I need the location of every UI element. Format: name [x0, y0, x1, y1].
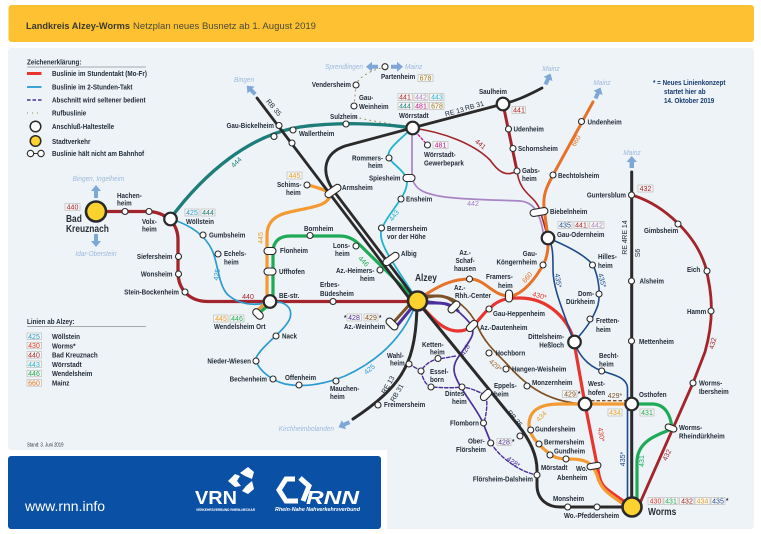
stations east: Eich	[687, 267, 700, 274]
line labels: 444	[230, 156, 244, 170]
arrow: Mainz Saulheim	[541, 66, 560, 87]
stations central: Eppels-	[494, 383, 517, 390]
stations west: Lons-	[333, 243, 351, 250]
legend: Linien ab Alzey: 443	[28, 362, 40, 369]
stations central: Monzernheim	[532, 380, 573, 387]
arrow: Mainz Partenheim: Mainz	[405, 64, 423, 71]
stations west: Uffhofen	[279, 269, 305, 276]
hub stations	[164, 98, 638, 410]
stations east: Ibersheim	[699, 389, 729, 396]
stations central: Az.-	[454, 285, 466, 292]
legend: Linien ab Alzey: 440	[28, 352, 40, 359]
line number badges: 435	[712, 498, 724, 506]
line number badges: 429	[365, 315, 377, 322]
arrow: Sprendlingen	[325, 62, 378, 72]
legend: Linien ab Alzey: Linien ab Alzey:	[27, 319, 75, 326]
header bar: Netzplan neues Busnetz ab 1. August 2019	[133, 21, 316, 31]
legend: symbols: Buslinie hält nicht am Bahnhof	[52, 151, 145, 158]
logo: RNN	[275, 478, 361, 513]
line number badges: 443	[431, 94, 443, 102]
stations north: Gau-Odernheim	[557, 232, 604, 239]
line number badges	[65, 74, 729, 506]
line number badges: 432	[681, 498, 693, 506]
logo: VRN: VERKEHRSVERBUND RHEIN-NECKAR	[196, 508, 256, 512]
note: neues Linienkonzept: 14. Oktober 2019	[664, 98, 714, 105]
stations east: Guntersblum	[587, 192, 626, 200]
stations central: Wo.-Pfeddersheim	[564, 513, 619, 520]
note: neues Linienkonzept: * = Neues Linienkonzept	[653, 80, 726, 87]
line number badges: *	[344, 315, 347, 322]
stations east	[496, 192, 729, 441]
line labels: 429*	[487, 359, 503, 373]
stations west: Nieder-Wiesen	[207, 358, 251, 366]
line number badges: *	[726, 498, 729, 505]
stations east: Becht-	[599, 353, 619, 360]
stations central: Abenheim	[557, 475, 587, 482]
line labels: 440	[242, 294, 254, 301]
stations central: Gau-Heppenheim	[493, 311, 545, 318]
line: 446 green	[258, 236, 417, 314]
stations north: Sulzheim	[330, 114, 358, 121]
arrow: Idar-Oberstein	[75, 234, 117, 258]
stations central: Hangen-Weisheim	[512, 366, 566, 374]
line labels: 660	[521, 271, 534, 285]
logo: VRN: VRN	[195, 488, 237, 508]
stations west: Nack	[282, 333, 297, 341]
line labels: 431	[639, 455, 646, 467]
legend: Linien ab Alzey: Wendelsheim	[52, 371, 92, 378]
line number badges: 431	[641, 410, 653, 417]
line labels: 442	[467, 201, 479, 208]
line number badges: 445	[289, 173, 300, 180]
stations central: Az.-	[459, 250, 471, 257]
arrow: Sprendlingen: Sprendlingen	[325, 64, 363, 71]
stations north: Spiesheim	[369, 175, 400, 183]
line number badges: 442	[591, 222, 603, 230]
line number badges: *	[578, 391, 581, 398]
line: 429 brown	[417, 296, 585, 404]
city stop: Alzey	[408, 272, 438, 310]
stations west: Büdesheim	[320, 291, 354, 298]
stations east: Dom-	[578, 291, 595, 298]
legend: Linien ab Alzey: 425	[28, 334, 40, 341]
line labels: 430*	[596, 427, 605, 443]
stations north	[227, 64, 622, 258]
line: railway RB 35 south	[417, 301, 632, 507]
line number badges: 678	[420, 76, 431, 82]
city stop: Worms: Worms	[648, 506, 676, 518]
line labels: 660	[571, 134, 583, 148]
line labels: 428*	[460, 341, 473, 357]
line labels: 446	[356, 255, 370, 269]
line number badges: 434	[609, 410, 621, 417]
arrow: Kirchheimbolanden: Kirchheimbolanden	[279, 426, 334, 433]
line labels: 428*	[505, 456, 521, 470]
line labels: S6	[635, 249, 642, 257]
stations east: Gau-	[523, 251, 538, 258]
stations central: heim	[390, 360, 405, 368]
line labels: 434	[535, 410, 549, 424]
stations north: Schornsheim	[518, 146, 558, 153]
line: 481 pink dashed	[412, 128, 428, 145]
city stop: Bad Kreuznach: Kreuznach	[66, 223, 109, 235]
line number badges: 444	[399, 104, 411, 110]
line number badges: *	[379, 315, 382, 322]
stations north: heim	[368, 163, 383, 170]
line: 432 dark red	[632, 195, 711, 503]
line number badges: 425	[186, 210, 198, 217]
arrow: Idar-Oberstein: Idar-Oberstein	[75, 251, 117, 258]
arrow: Mainz Undenheim: Mainz	[593, 80, 611, 87]
line labels: 430*	[532, 291, 548, 302]
stations west: Armsheim	[342, 185, 373, 192]
line: 435 dark blue	[548, 238, 628, 505]
stations central: heim	[452, 399, 467, 406]
stations central: Bermersheim	[544, 439, 584, 447]
line labels: 432	[709, 337, 718, 350]
legend: symbols: Buslinie im 2-Stunden-Takt	[52, 84, 133, 92]
stations west: Siefersheim	[137, 254, 173, 261]
line labels: 441	[473, 138, 487, 151]
stations north: Gau-	[359, 95, 374, 102]
legend: Linien ab Alzey: Bad Kreuznach	[52, 352, 98, 360]
arrow: Bingen, Ingelheim: Bingen, Ingelheim	[73, 176, 124, 183]
line: railway RE 13 RB 31 north	[326, 88, 542, 302]
stations north: Ensheim	[406, 196, 432, 204]
logo: RNN: Rhein-Nahe Nahverkehrsverbund	[275, 507, 361, 513]
line: 428 purple thick near Alzey	[396, 303, 458, 327]
legend: symbols: Stadtverkehr	[52, 139, 91, 146]
arrow: Mainz Partenheim	[391, 62, 423, 72]
stations east: Worms-	[699, 380, 723, 388]
stations north: vor der Höhe	[387, 234, 426, 241]
stations north: Saulheim	[479, 89, 507, 96]
legend: symbols: Abschnitt wird seltener bedient	[52, 97, 146, 105]
stations central: Wahl-	[387, 353, 405, 360]
stations central: Hochborn	[495, 350, 525, 358]
stations central: Gundheim	[554, 448, 585, 456]
stations central: Rhh.-Center	[455, 293, 491, 300]
stations central: heim	[494, 391, 509, 399]
stations west: Schims-	[277, 182, 302, 189]
arrow: Kirchheimbolanden	[279, 418, 352, 433]
stations west: Stein-Bockenheim	[124, 289, 179, 297]
stations central: hausen	[454, 266, 476, 273]
line labels: RE 13	[444, 107, 465, 118]
stations west: Az.-Heimers-	[336, 268, 375, 275]
stations north: Rommers-	[352, 155, 384, 163]
stations east: Rheindürkheim	[679, 433, 725, 441]
line number badges: 432	[640, 186, 651, 193]
arrow: Bingen	[234, 77, 259, 98]
line: 443 cyan	[381, 128, 417, 300]
stations east: Mettenheim	[639, 339, 674, 346]
note: neues Linienkonzept	[653, 80, 726, 105]
legend: Linien ab Alzey: 430	[28, 343, 40, 350]
line number badges: 678	[431, 104, 443, 110]
logo: VRN	[195, 467, 256, 512]
city stop: Bad Kreuznach	[66, 202, 109, 235]
line number badges: 428	[348, 315, 360, 322]
stations central: Ketten-	[422, 342, 444, 349]
legend: symbols	[27, 59, 147, 158]
stations west: Offenheim	[285, 375, 316, 382]
line number badges: 441	[575, 222, 587, 230]
stations north: Vendersheim	[312, 82, 351, 89]
stations east: West-	[588, 381, 606, 388]
stations west: Gumbsheim	[209, 232, 245, 240]
line: Rufbus dotted	[354, 67, 412, 128]
stations east: hofen	[588, 390, 605, 397]
line labels: 435*	[620, 452, 627, 466]
footer url: www.rnn.info	[24, 498, 105, 514]
stations central: Schaf-	[455, 258, 475, 265]
stations east: Gimbsheim	[644, 228, 678, 235]
stations central: Flörsheim	[456, 447, 486, 454]
stations east: Worms-	[679, 425, 703, 432]
line: 425 light blue	[171, 219, 417, 386]
stations north: Undenheim	[588, 119, 622, 127]
line labels: 443	[389, 209, 401, 223]
stations central: Freimersheim	[384, 402, 425, 409]
stations east: Köngernheim	[496, 259, 537, 267]
legend: Linien ab Alzey: Worms*	[52, 343, 76, 351]
line labels: 445	[258, 232, 265, 244]
line labels: 435*	[553, 273, 562, 289]
stations central: heim	[498, 283, 513, 290]
stations west: heim	[142, 226, 157, 234]
stations central: Az.-Weinheim	[344, 324, 385, 331]
line: 429 brown dashed Westhofen-Osthofen	[591, 400, 626, 402]
city stop: Bad Kreuznach: Bad	[66, 213, 82, 225]
line number badges: 441	[399, 94, 411, 102]
line labels: 435*	[596, 273, 607, 289]
line number badges: 445	[215, 316, 227, 323]
stations north: Weinheim	[359, 104, 389, 111]
line: 441 dark red	[412, 128, 548, 238]
stations east: heim	[596, 327, 611, 334]
line labels: 429*	[608, 393, 622, 400]
stations central: Ober-	[468, 438, 485, 446]
line labels: RE 14	[622, 220, 629, 240]
date note: Stand: 3. Juni 2019	[27, 442, 64, 448]
stations west: Echels-	[224, 251, 247, 258]
line: 428 purple dashed	[409, 356, 537, 475]
stations west: Volx-	[142, 219, 158, 226]
stations west: Wonsheim	[141, 271, 173, 279]
stations east: Heßloch	[539, 342, 564, 350]
stations north: Wörrstadt-	[424, 152, 456, 159]
stations central: Framers-	[486, 274, 514, 281]
stations north: Albig	[401, 251, 417, 258]
stations west: Mauchen-	[330, 386, 360, 393]
line: 431 green	[632, 404, 672, 503]
legend: symbols: Anschluß-Haltestelle	[52, 124, 114, 131]
stations north: Gewerbepark	[424, 160, 464, 168]
line number badges: 429	[564, 392, 576, 398]
legend: symbols: Zeichenerklärung:	[27, 59, 81, 67]
line number badges: 435	[559, 222, 571, 230]
line labels: 425	[213, 268, 222, 281]
stations east: Osthofen	[639, 392, 667, 399]
stations east: Alsheim	[640, 278, 664, 286]
stations west: Wendelsheim Ort	[214, 324, 266, 331]
stations central: Gundersheim	[535, 426, 576, 434]
stations east: Hamm	[687, 309, 706, 316]
footer panel	[8, 456, 381, 529]
stations west: BE-str.	[279, 293, 299, 300]
stations central: Wo.-	[576, 466, 590, 473]
transfer capsules	[251, 174, 678, 470]
line labels: RB 31	[390, 383, 406, 403]
line number badges: 441	[513, 108, 525, 114]
arrow: Mainz Guntersblum: Mainz	[623, 150, 641, 157]
arrow: Mainz Guntersblum	[623, 150, 641, 168]
line: railway RE 13 RB 31 south	[353, 301, 417, 419]
arrow: Mainz Undenheim	[591, 80, 611, 101]
arrow: Mainz Saulheim: Mainz	[542, 66, 560, 73]
stations east: Dittelsheim-	[528, 334, 565, 341]
line number badges: 481	[435, 142, 446, 150]
stations north: Gau-Bickelheim	[227, 123, 274, 130]
legend: Linien ab Alzey: Mainz	[52, 380, 70, 388]
legend: symbols: Rufbuslinie	[52, 110, 86, 118]
stations west: heim	[224, 259, 239, 267]
legend: Linien ab Alzey: Wörrstadt	[52, 362, 82, 369]
stations central: born	[430, 377, 444, 384]
stations central: Flörsheim-Dalsheim	[473, 476, 533, 484]
line labels	[213, 98, 718, 470]
line number badges: 428	[498, 440, 510, 446]
stations central: Az.-Dautenheim	[480, 325, 527, 332]
line labels: RB 31	[464, 101, 485, 112]
stations west: Wöllstein	[186, 219, 214, 226]
stations east: Fretten-	[596, 318, 620, 325]
stations east: Dürkheim	[566, 299, 595, 306]
line: 442 lilac	[412, 128, 544, 238]
stations central: Essel-	[430, 369, 449, 376]
stations west: Bornheim	[304, 226, 333, 233]
line: 428 purple	[417, 301, 491, 443]
stations east: Hilles-	[598, 254, 618, 261]
line number badges: *	[512, 439, 515, 446]
stations north: Partenheim	[381, 74, 415, 81]
stations central: heim	[430, 349, 445, 357]
stations west	[117, 182, 383, 401]
line labels: 425	[363, 363, 377, 376]
legend: symbols: Buslinie im Stundentakt (Mo-Fr)	[52, 71, 147, 78]
legend: Linien ab Alzey	[27, 319, 146, 388]
note: neues Linienkonzept: startet hier ab	[664, 89, 706, 96]
line number badges: 440	[67, 204, 78, 212]
stations west: Erbes-	[320, 282, 340, 289]
city stop: Alzey: Alzey	[415, 272, 438, 284]
stations west: heim	[117, 200, 132, 208]
logo: RNN: RNN	[306, 488, 360, 508]
city stop: Worms	[622, 498, 676, 518]
stations central: Monsheim	[553, 496, 584, 503]
line: 441 Saulheim section	[503, 104, 517, 171]
header bar: Landkreis Alzey-Worms	[26, 21, 130, 31]
arrow: Bingen, Ingelheim	[73, 176, 124, 198]
line number badges: 430	[650, 498, 661, 506]
stations north: Bechtolsheim	[558, 173, 599, 180]
line: 430 red	[417, 298, 632, 507]
line: 434 orange	[529, 404, 632, 505]
line number badges: 446	[231, 316, 243, 323]
line: 445 orange	[256, 185, 331, 312]
line labels: 432	[662, 449, 673, 462]
header bar	[8, 5, 754, 42]
stations west: Bechenheim	[230, 376, 267, 384]
stations north: Biebelnheim	[550, 209, 587, 216]
line: 444 teal	[170, 124, 412, 219]
line labels: RE 13	[381, 375, 397, 395]
line labels: RE 4	[622, 239, 629, 255]
stations central: Flomborn	[450, 420, 479, 428]
line: 440 dark red	[96, 212, 417, 302]
line number badges: 434	[697, 498, 708, 506]
arrow: Bingen: Bingen	[234, 77, 254, 84]
legend: Linien ab Alzey: 446	[28, 371, 40, 378]
legend: Linien ab Alzey: 660	[28, 380, 40, 387]
stations north: Wallertheim	[299, 131, 334, 138]
stations north: Wörrstadt	[399, 113, 429, 120]
legend: Linien ab Alzey: Wöllstein	[52, 334, 80, 341]
stations north: Udenheim	[514, 126, 544, 134]
line number badges: 444	[202, 210, 214, 217]
line labels: RB 35	[505, 409, 523, 429]
stations west: heim	[360, 276, 375, 283]
line: 429 brown thick near Alzey	[392, 296, 457, 324]
line: railway RE 4 RE 14	[630, 172, 633, 507]
stations west: heim	[330, 394, 345, 401]
stations west: heim	[335, 251, 350, 258]
line number badges: 431	[665, 498, 677, 506]
line number badges: 442	[415, 94, 427, 102]
stations north: heim	[522, 176, 537, 183]
stations central	[344, 250, 619, 520]
line number badges: 481	[415, 104, 427, 110]
stations west: heim	[286, 190, 301, 197]
stations central: Mörstadt	[541, 465, 568, 472]
line labels: RB 35	[264, 98, 282, 118]
stations north: Bermersheim	[387, 226, 427, 233]
stations east: heim	[598, 263, 613, 270]
stations west: Hachen-	[117, 193, 142, 200]
stations central: Dintes-	[445, 391, 467, 398]
stations east: heim	[599, 361, 614, 369]
line: railway RB 35 north	[257, 98, 412, 302]
stations north: Gabs-	[522, 168, 540, 175]
stations west: Flonheim	[280, 248, 308, 255]
line: 660 orange	[420, 102, 593, 298]
